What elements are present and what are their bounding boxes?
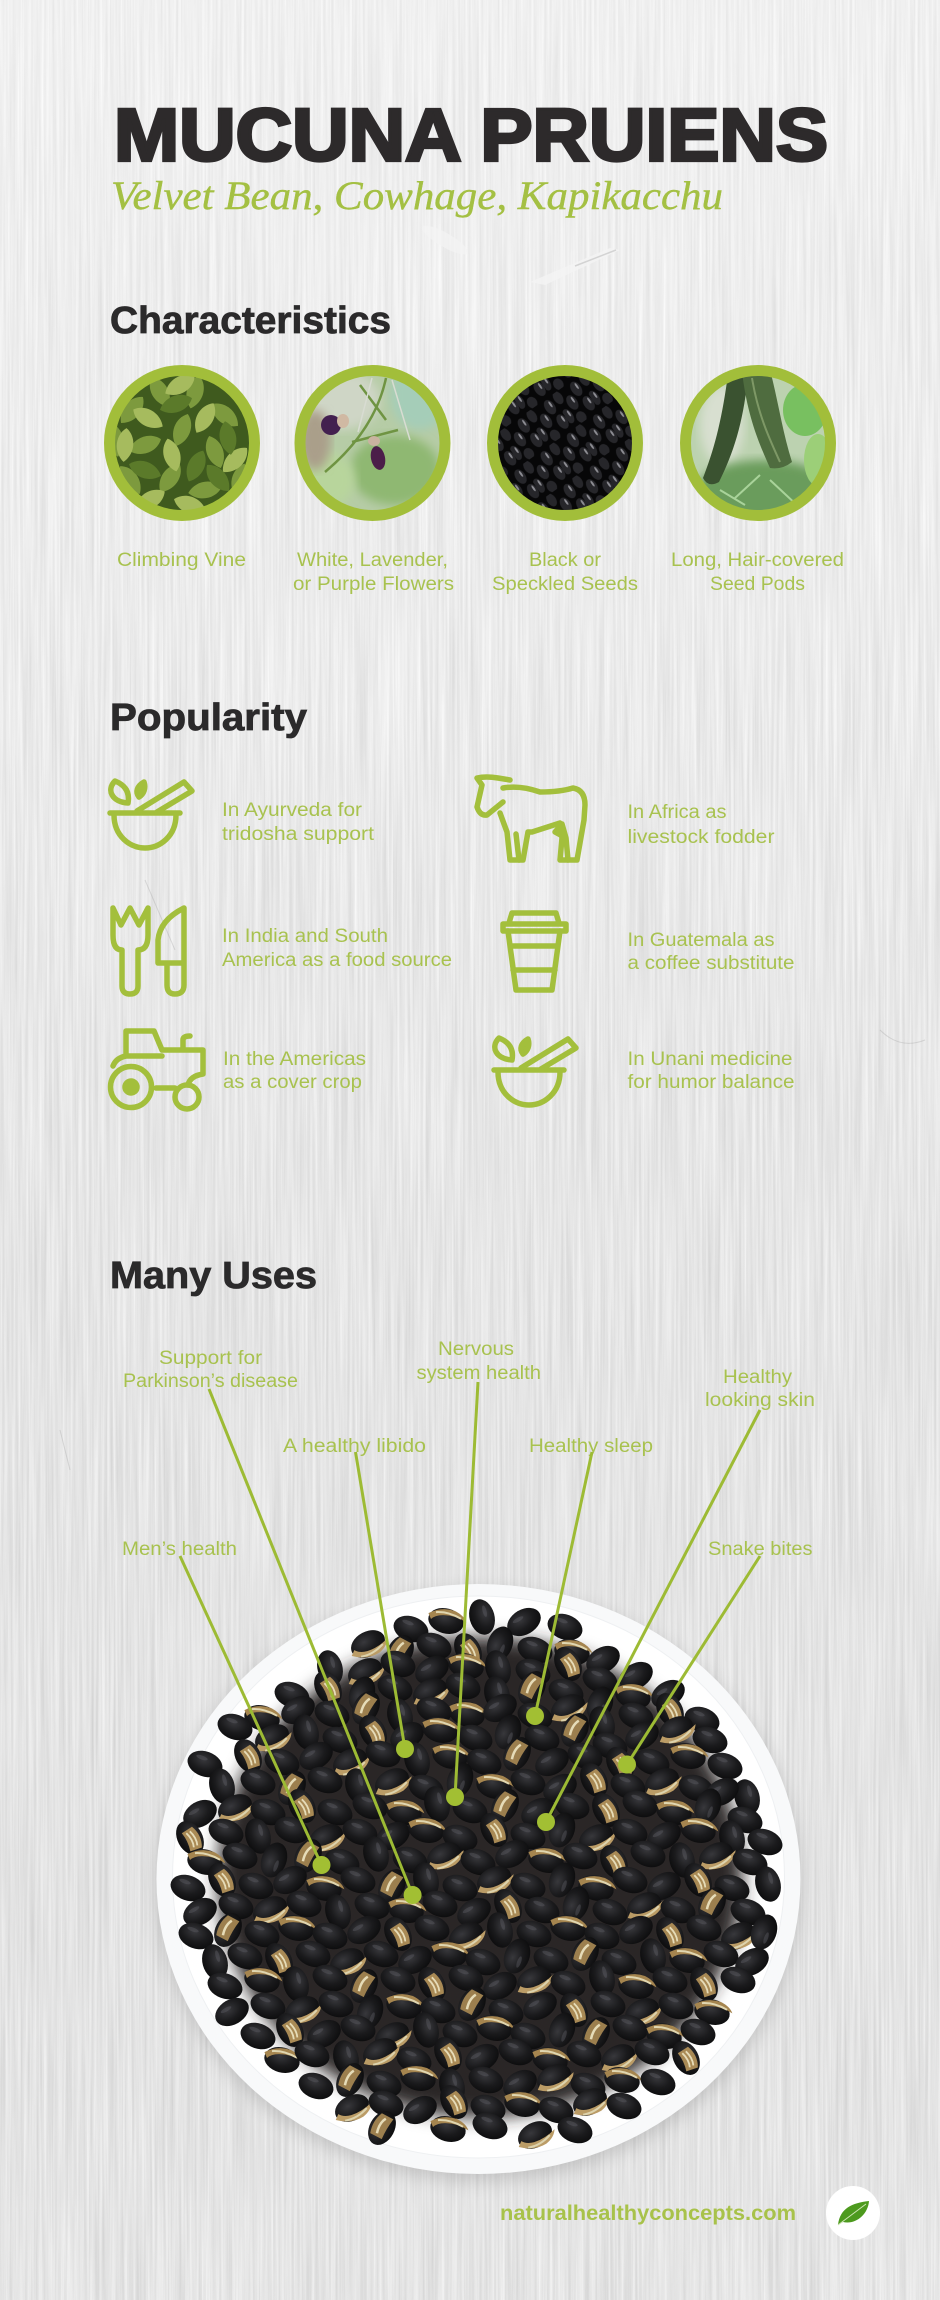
callout: healthy looking skin <box>537 1367 815 1831</box>
panel: popularity <box>110 777 794 1109</box>
callout: nervous system health <box>416 1339 541 1806</box>
label: seeds <box>492 550 638 595</box>
heading: Characteristics: Characteristics <box>110 300 391 342</box>
text: Ayurveda <box>222 800 375 845</box>
footer: website: naturalhealthyconcepts.com <box>500 2202 796 2225</box>
label: seeds: Black or <box>529 550 602 571</box>
panel: characteristics <box>104 360 844 595</box>
text: Unani <box>628 1049 794 1093</box>
callout: nervous system health: Nervous <box>438 1339 514 1360</box>
text: Americas: In the Americas <box>223 1049 366 1070</box>
icon: leaf logo <box>826 2186 880 2240</box>
title: MUCUNA PRUIENS <box>114 94 828 176</box>
photo: black seeds <box>492 370 638 516</box>
text: Americas: as a cover crop <box>223 1072 362 1093</box>
photo: purple flowers <box>295 360 450 516</box>
text: Unani: In Unani medicine <box>628 1049 792 1070</box>
callout: Parkinson's disease <box>123 1348 422 1904</box>
subtitle: Velvet Bean, Cowhage, Kapikacchu <box>111 173 723 218</box>
callout: snake bites: Snake bites <box>708 1539 812 1560</box>
callout: nervous system health: system health <box>416 1363 541 1384</box>
heading: Popularity: Popularity <box>110 697 307 739</box>
text: India <box>222 926 452 971</box>
text: Unani: for humor balance <box>628 1072 794 1093</box>
text: India: America as a food source <box>222 950 452 971</box>
label: seeds: Speckled Seeds <box>492 574 638 595</box>
heading: Many Uses: Many Uses <box>110 1255 317 1297</box>
text: India: In India and South <box>222 926 388 947</box>
plate of mucuna beans <box>156 1584 801 2181</box>
label: flowers: or Purple Flowers <box>293 574 454 595</box>
label: flowers <box>293 550 454 595</box>
text: Africa: livestock fodder <box>628 827 775 848</box>
photo: climbing vine <box>104 366 255 519</box>
text: Africa <box>628 802 775 848</box>
callout: Parkinson's disease: Support for <box>159 1348 263 1369</box>
callout: snake bites <box>618 1539 812 1774</box>
text: Americas <box>223 1049 366 1093</box>
text: Ayurveda: In Ayurveda for <box>222 800 363 821</box>
icon: coffee cup <box>503 913 566 990</box>
callout: libido: A healthy libido <box>283 1436 426 1457</box>
label: climbing vine: Climbing Vine <box>117 550 246 571</box>
text: Guatemala: a coffee substitute <box>628 953 794 974</box>
icon: fork and knife <box>113 908 184 994</box>
callout: libido <box>283 1436 426 1758</box>
callout: Parkinson's disease: Parkinson’s disease <box>123 1371 298 1392</box>
callout: sleep: Healthy sleep <box>529 1436 653 1457</box>
callout: sleep <box>526 1436 653 1725</box>
text: Guatemala: In Guatemala as <box>628 930 774 951</box>
icon: tractor <box>110 1031 203 1109</box>
icon: cow <box>477 777 585 860</box>
icon: mortar and pestle 2 <box>494 1038 576 1105</box>
text: Africa: In Africa as <box>628 802 726 823</box>
callout: men's health: Men’s health <box>122 1539 237 1560</box>
icon: mortar and pestle <box>110 781 192 848</box>
callout: healthy looking skin: looking skin <box>705 1390 815 1411</box>
label: pods: Seed Pods <box>710 574 805 595</box>
callouts: uses <box>122 1339 815 1904</box>
label: flowers: White, Lavender, <box>297 550 448 571</box>
callout: healthy looking skin: Healthy <box>723 1367 793 1388</box>
callout: men's health <box>122 1539 330 1874</box>
photo: seed pods <box>680 370 835 524</box>
text: Guatemala <box>628 930 794 974</box>
label: pods: Long, Hair-covered <box>671 550 844 571</box>
text: Ayurveda: tridosha support <box>222 824 375 845</box>
label: pods <box>671 550 844 595</box>
